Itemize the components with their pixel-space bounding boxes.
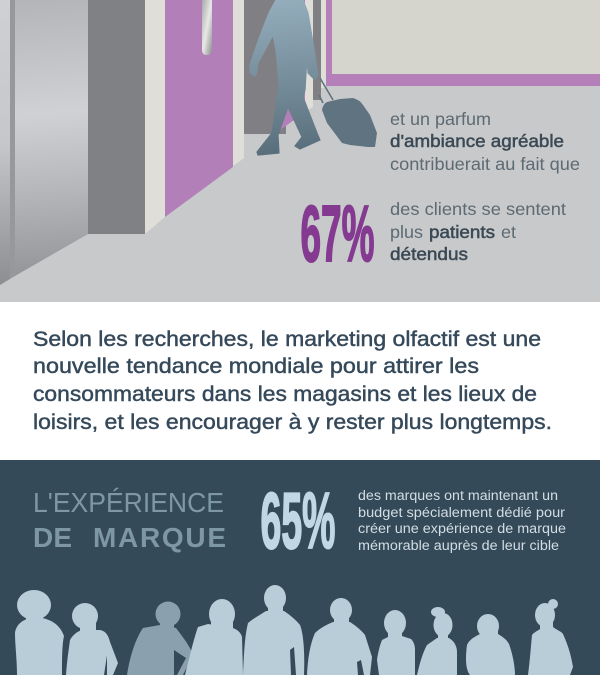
text: 65% description (358, 488, 566, 553)
panel: hotel corridor scene (0, 0, 600, 302)
text: 65% description: des marques ont maintenant un (358, 488, 558, 503)
text: research paragraph (33, 328, 552, 434)
text: 65% description: budget spécialement dédié pour (358, 505, 566, 520)
heading: l'expérience de marque (33, 487, 226, 553)
far door frame (233, 0, 244, 166)
far gray door (244, 0, 286, 134)
door handle (202, 0, 212, 55)
person 10 (528, 599, 573, 675)
corridor wall: gray door (88, 0, 145, 234)
person 1 (15, 590, 64, 675)
text: 67% description: plus (390, 222, 423, 242)
panel: research statement (0, 302, 600, 460)
icon: rolling suitcase (319, 78, 377, 147)
text: research paragraph: nouvelle tendance mondiale pour attirer les (33, 355, 479, 378)
text: 65% description: créer une expérience de marque (358, 521, 566, 536)
heading: l'expérience de marque: L'EXPÉRIENCE (33, 487, 224, 518)
far cream frame (305, 0, 313, 112)
person 7 (377, 610, 415, 675)
person 2 (66, 603, 118, 675)
text: 65% description: mémorable auprès de leur cible (358, 538, 559, 553)
text: 67% description: des clients se sentent (390, 199, 566, 219)
heading: l'expérience de marque: DE (33, 522, 72, 553)
panel: brand experience (0, 460, 600, 675)
purple door (165, 0, 233, 217)
text: research paragraph: loisirs, et les encourager à y rester plus longtemps. (33, 411, 552, 434)
person 9 (466, 614, 515, 675)
door frame (145, 0, 165, 234)
icon: traveller silhouette (250, 0, 320, 155)
text: 67% description (390, 199, 566, 264)
far gray strip (313, 0, 321, 100)
text: ambient fragrance: contribuerait au fait que (390, 154, 580, 174)
panel: brand experience: 65% (260, 476, 336, 565)
crowd silhouettes (15, 585, 573, 675)
text: 67% description: patients (429, 222, 495, 242)
text: ambient fragrance: d'ambiance agréable (390, 131, 564, 151)
person 5 (243, 585, 304, 675)
elevator door (0, 0, 88, 285)
panel: hotel corridor scene: 67% (300, 189, 374, 278)
person 8 (417, 607, 457, 675)
text: ambient fragrance (390, 109, 580, 174)
text: ambient fragrance: et un parfum (390, 109, 491, 129)
heading: l'expérience de marque: MARQUE (93, 522, 226, 553)
text: 67% description: et (501, 222, 516, 242)
text: 67% description: détendus (390, 244, 468, 264)
person 4 (185, 599, 243, 675)
person 3 (127, 602, 193, 675)
far purple wall (280, 0, 305, 130)
text: research paragraph: Selon les recherches, le marketing olfactif est une (33, 328, 541, 351)
wall picture frame (326, 0, 600, 86)
text: research paragraph: consommateurs dans les magasins et les lieux de (33, 383, 537, 406)
person 6 (307, 598, 372, 675)
